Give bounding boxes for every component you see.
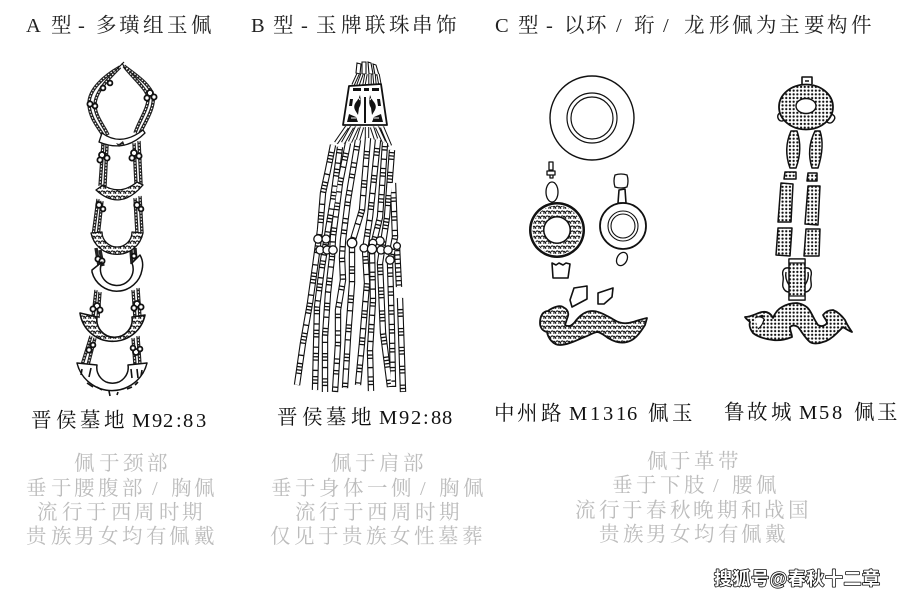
knot beads [86, 81, 157, 355]
caption: C specimen 1: 中州路 M1316 佩玉 [494, 402, 692, 425]
illustration: type B plaque and bead tassel [297, 62, 403, 392]
carved disc [529, 202, 585, 258]
caption: A specimen: 晋侯墓地 M92:83 [31, 409, 206, 432]
plaque [343, 84, 387, 125]
caption: B specimen: 晋侯墓地 M92:88 [277, 406, 452, 429]
central plaque handles [783, 268, 811, 292]
text block: type B description: 佩于肩部 [331, 452, 424, 475]
text block: type A description: 垂于腰腹部 / 胸佩 [26, 477, 214, 500]
huang 1 [99, 130, 145, 146]
heading: type C: C 型 - 以环 / 珩 / 龙形佩为主要构件 [495, 14, 872, 37]
dotted tubes [776, 131, 822, 300]
text block: type B description [270, 452, 484, 548]
dotted dragon [745, 303, 852, 344]
text block: type A description: 佩于颈部 [74, 452, 168, 475]
huang 4 [92, 255, 143, 291]
text block: type C description: 流行于春秋晚期和战国 [575, 499, 808, 522]
huang 5 [80, 313, 145, 341]
tilted pieces [570, 286, 587, 307]
dragon pendant [540, 306, 647, 345]
illustration: type C ring, discs and dragon [529, 76, 852, 345]
plain disc with beads [614, 174, 628, 188]
top bead bundle [356, 62, 379, 75]
heading: type A: A 型 - 多璜组玉佩 [26, 14, 212, 37]
watermark: 搜狐号@春秋十二章 [714, 568, 880, 589]
large bi ring [550, 76, 634, 160]
dotted disc [802, 77, 812, 84]
text block: type B description: 仅见于贵族女性墓葬 [270, 525, 482, 548]
text block: type A description [26, 452, 214, 548]
caption: C specimen 2: 鲁故城 M58 佩玉 [724, 401, 898, 424]
huang 2 [96, 182, 143, 200]
text block: type A description: 流行于西周时期 [37, 501, 202, 524]
trapezoid bead [552, 263, 570, 278]
huang 3 [91, 232, 143, 254]
bead strands [297, 138, 403, 392]
text block: type A description: 贵族男女均有佩戴 [26, 525, 214, 548]
text block: type B description: 垂于身体一侧 / 胸佩 [271, 477, 484, 500]
text block: type B description: 流行于西周时期 [295, 501, 460, 524]
huang 6 [77, 363, 147, 391]
text block: type C description [575, 450, 808, 546]
fan beads [336, 127, 390, 146]
illustration: type A multi-huang jade pendant [77, 62, 157, 396]
heading: type B: B 型 - 玉牌联珠串饰 [251, 14, 456, 37]
knot at top [116, 62, 126, 70]
text block: type C description: 垂于下肢 / 腰佩 [612, 474, 776, 497]
text block: type C description: 贵族男女均有佩戴 [599, 523, 786, 546]
connector and oval bead [547, 162, 555, 178]
round beads [314, 235, 400, 264]
text block: type C description: 佩于革带 [647, 450, 738, 473]
